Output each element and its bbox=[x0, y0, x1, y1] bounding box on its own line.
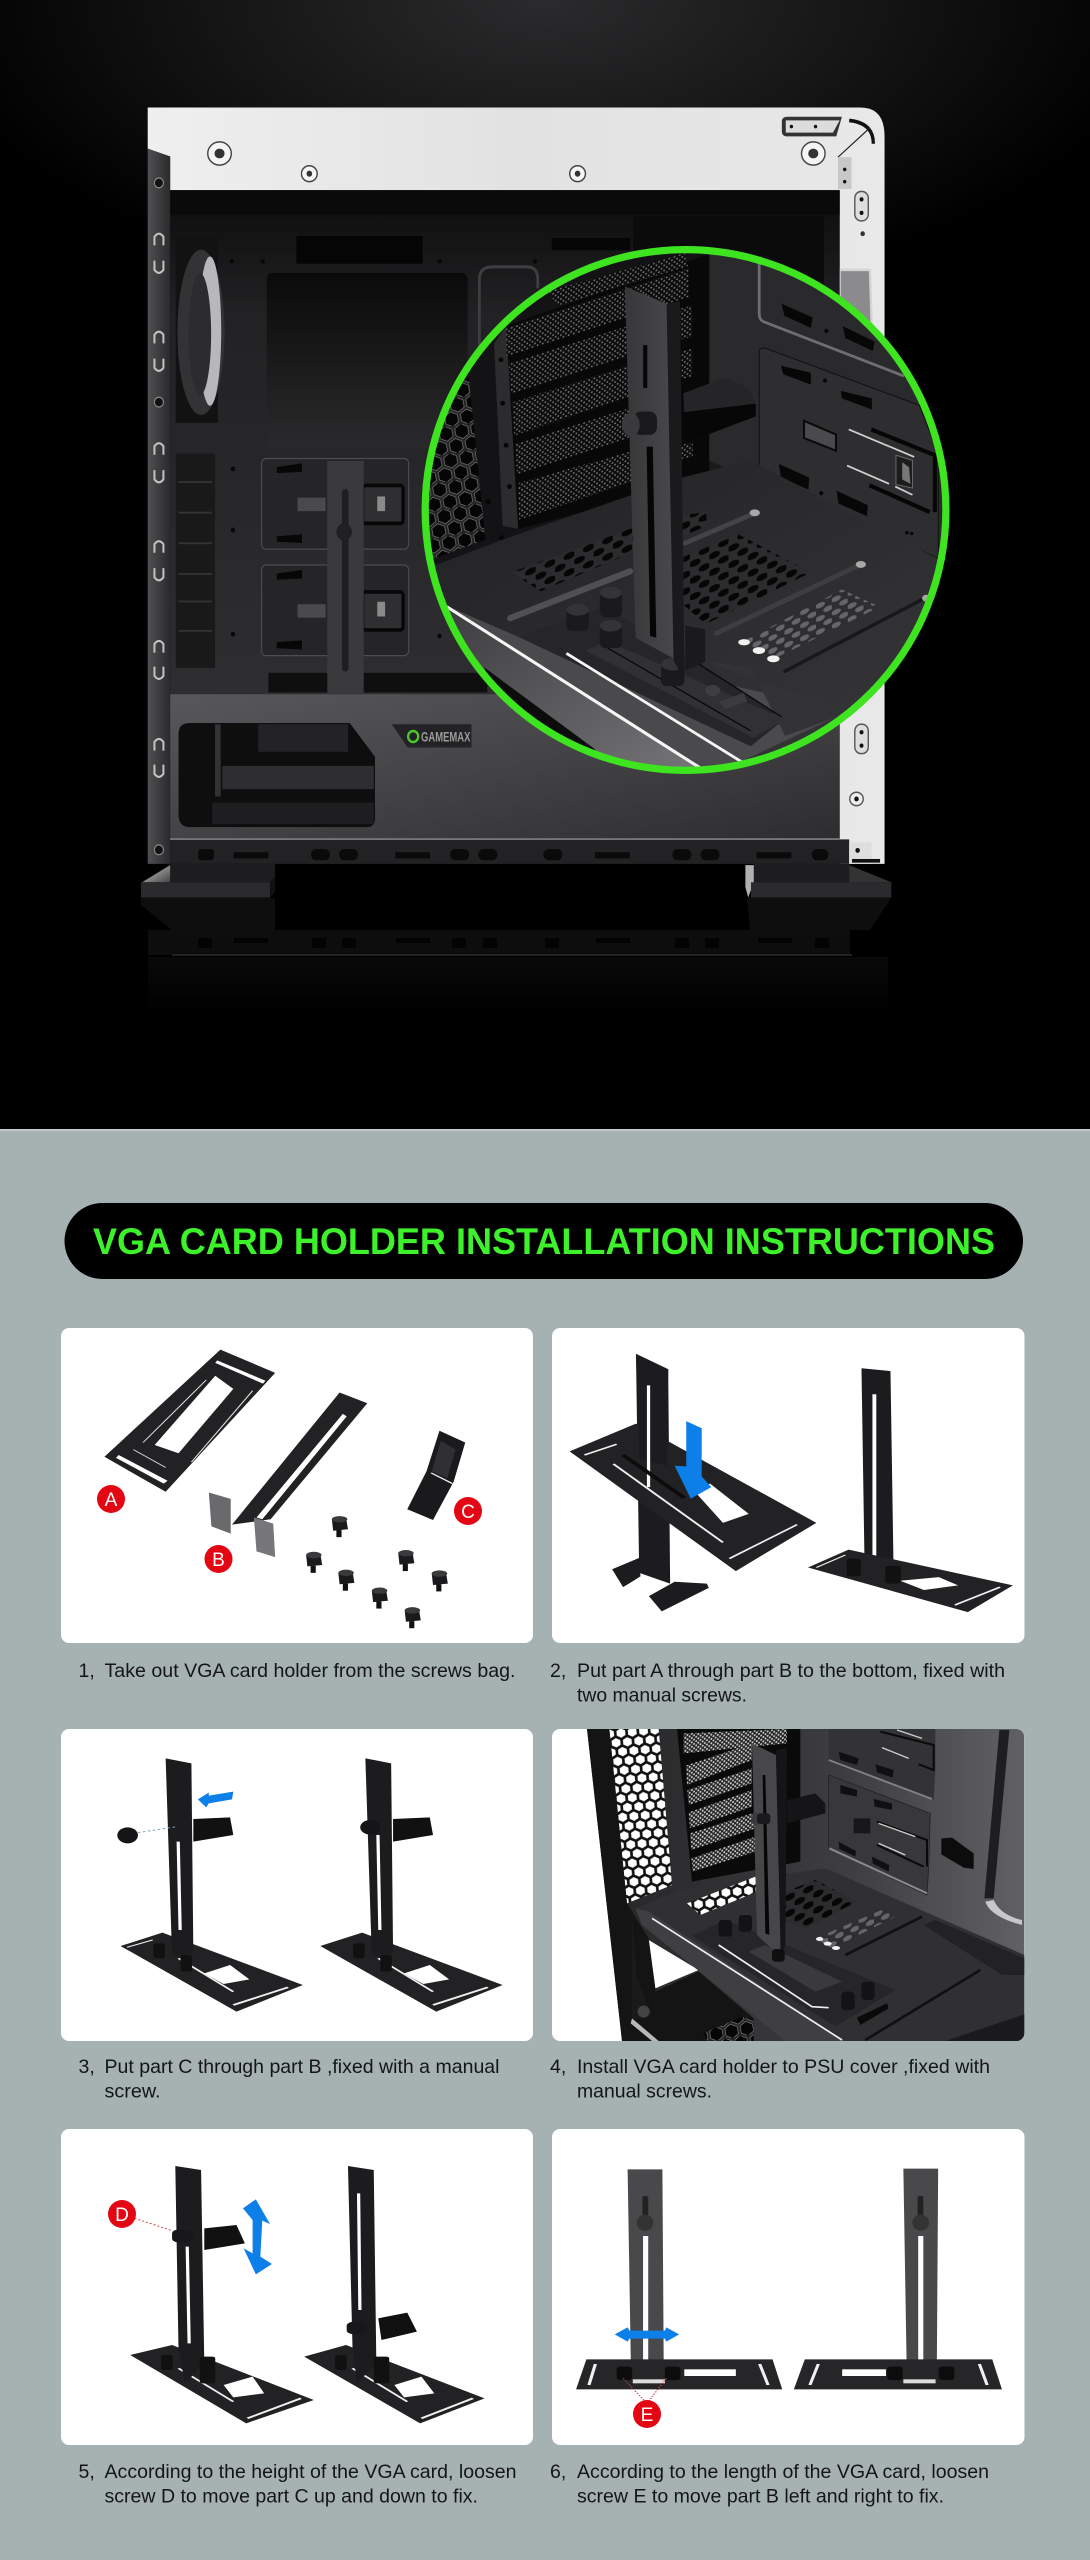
caption step 6: 6, bbox=[550, 2461, 566, 2483]
PSU shroud bbox=[170, 694, 840, 839]
case interior bbox=[587, 1729, 1024, 2041]
icon: blue left arrow bbox=[198, 1792, 233, 1807]
PSU fan under shelf bbox=[655, 1972, 754, 2041]
hex mesh wall bbox=[609, 1729, 672, 1903]
assembled holder bbox=[808, 1368, 1013, 1612]
icon: blue up-down arrow bbox=[243, 2199, 272, 2274]
VGA holder side view bbox=[268, 461, 487, 694]
case fan bbox=[176, 236, 225, 423]
caption step 3: 3, bbox=[78, 2056, 95, 2078]
caption step 5: 5, bbox=[78, 2461, 95, 2483]
left rail with cable slots bbox=[148, 149, 170, 864]
white top panel and right rail bbox=[148, 108, 885, 864]
bottom rail bbox=[170, 838, 880, 864]
part A base plate bbox=[104, 1350, 275, 1492]
caption step 1: Take out VGA card holder from the screws bag. bbox=[104, 1660, 516, 1682]
front bevel with white highlight bbox=[448, 606, 834, 767]
front view holder right position bbox=[794, 2169, 1002, 2389]
caption step 2: two manual screws. bbox=[577, 1684, 747, 1706]
hero background bbox=[0, 0, 1090, 1129]
caption step 3: screw. bbox=[104, 2080, 160, 2102]
caption step 6: According to the length of the VGA card, loosen bbox=[577, 2461, 989, 2483]
caption step 3 bbox=[78, 2056, 500, 2102]
holder with part C high bbox=[130, 2166, 314, 2423]
label C bbox=[454, 1497, 482, 1525]
caption step 4 bbox=[550, 2056, 990, 2102]
holder base screws bbox=[566, 587, 684, 686]
GAMEMAX logo badge: GAMEMAX bbox=[421, 729, 471, 745]
caption step 5 bbox=[78, 2461, 516, 2508]
caption step 1: 1, bbox=[78, 1660, 95, 1682]
caption step 3: Put part C through part B ,fixed with a manual bbox=[104, 2056, 500, 2078]
label B: B bbox=[212, 1550, 225, 1571]
icon: blue down arrow bbox=[675, 1421, 711, 1499]
PCI slot covers bbox=[677, 1729, 800, 1882]
holder with screw fitted bbox=[320, 1758, 503, 2012]
icon: blue left-right arrow bbox=[615, 2327, 679, 2342]
side wall cage plates bbox=[829, 1729, 1022, 1925]
caption step 5: According to the height of the VGA card, loosen bbox=[104, 2461, 516, 2483]
caption step 2: 2, bbox=[550, 1660, 566, 1682]
caption step 4: manual screws. bbox=[577, 2080, 712, 2102]
caption step 4: Install VGA card holder to PSU cover ,fixed with bbox=[577, 2056, 990, 2078]
label C: C bbox=[461, 1502, 475, 1523]
panel: step 3 slider bbox=[61, 1729, 533, 2041]
caption step 6: screw E to move part B left and right to fix. bbox=[577, 2486, 944, 2508]
panel: step 6 length adjust bbox=[552, 2129, 1024, 2445]
upright behind plate bbox=[612, 1354, 709, 1611]
vertical holder bracket bbox=[751, 1743, 825, 1962]
label A: A bbox=[105, 1490, 118, 1511]
case feet bbox=[141, 864, 891, 898]
part B upright bbox=[209, 1392, 367, 1557]
interior back panel bbox=[170, 190, 840, 695]
panel: step 4 installed in case bbox=[552, 1729, 1024, 2041]
magnified detail circle bbox=[420, 240, 960, 780]
left chassis post bbox=[587, 1729, 659, 2041]
caption step 6 bbox=[550, 2461, 989, 2508]
right wall and drive cage bbox=[709, 254, 942, 558]
title banner: VGA CARD HOLDER INSTALLATION INSTRUCTIONS bbox=[93, 1221, 995, 1262]
instructions section background bbox=[0, 1129, 1090, 2560]
caption step 2 bbox=[550, 1660, 1005, 1706]
holder with part C low bbox=[304, 2166, 485, 2423]
panel: step 1 parts bbox=[61, 1328, 533, 1643]
caption step 5: screw D to move part C up and down to fix. bbox=[104, 2486, 478, 2508]
tilted base plate bbox=[570, 1354, 816, 1571]
label A bbox=[97, 1485, 125, 1513]
GAMEMAX logo badge bbox=[392, 724, 472, 748]
green ring bbox=[425, 250, 946, 770]
drive cages bbox=[262, 458, 409, 656]
label D bbox=[108, 2200, 136, 2228]
floor reflection of the case bbox=[141, 898, 891, 1015]
back wall with hex mesh bbox=[428, 327, 518, 558]
label E: E bbox=[641, 2405, 653, 2426]
label E bbox=[633, 2400, 661, 2428]
PC case photo bbox=[141, 108, 891, 898]
holder with loose screw bbox=[117, 1758, 303, 2012]
label B bbox=[204, 1545, 232, 1573]
floor and shelf bbox=[635, 1868, 1024, 2041]
caption step 4: 4, bbox=[550, 2056, 566, 2078]
panel: step 5 height adjust bbox=[61, 2129, 533, 2445]
front view holder left position bbox=[576, 2169, 782, 2389]
PCI slot covers bbox=[506, 253, 731, 529]
expansion slots at left bbox=[176, 454, 215, 668]
title banner bbox=[64, 1203, 1023, 1279]
open side below shelf bbox=[649, 1940, 699, 1988]
thumb screws bbox=[306, 1516, 448, 1628]
panel: step 2 assembly bbox=[552, 1328, 1024, 1643]
vertical holder bracket bbox=[622, 286, 756, 681]
part C slider bbox=[407, 1431, 465, 1520]
caption step 2: Put part A through part B to the bottom, fixed with bbox=[577, 1660, 1005, 1682]
label D: D bbox=[115, 2205, 129, 2226]
case floor with vent holes bbox=[435, 465, 936, 760]
